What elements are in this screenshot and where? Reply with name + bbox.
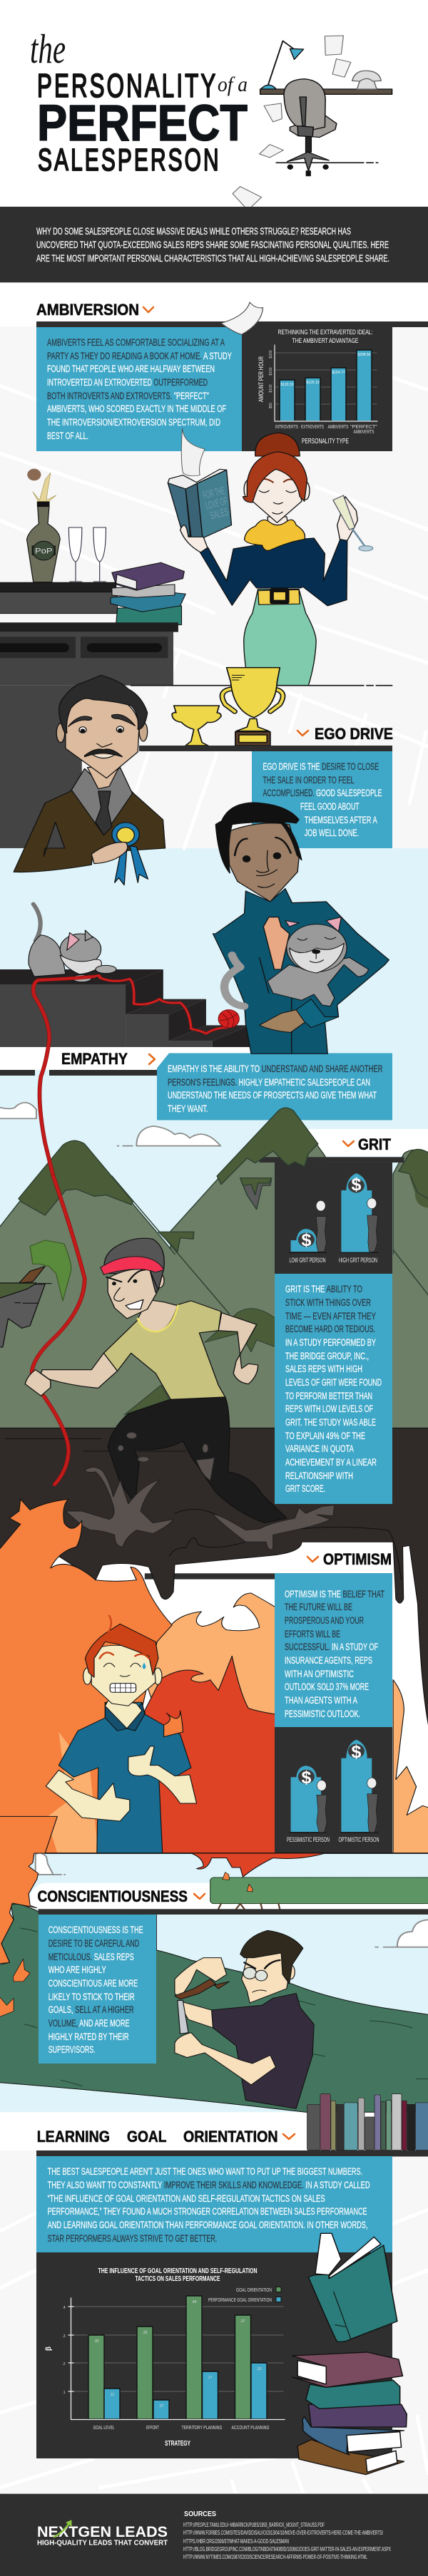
panel: conscientiousness text: LIKELY TO STICK TO THEIR — [49, 1991, 135, 2002]
mountains backdrop — [0, 1108, 428, 1256]
bar chart: goal orientation: .1 — [62, 2391, 66, 2395]
panel: empathy text: THEY WANT. — [168, 1103, 208, 1114]
grit header bar — [260, 1157, 404, 1163]
panel: optimism chart: $ — [302, 1768, 312, 1788]
title: SALESPERSON — [38, 142, 219, 177]
icon: shears — [178, 2001, 188, 2034]
heading: ego drive: EGO DRIVE — [315, 725, 393, 743]
logo: nextgen leads: HIGH-QUALITY LEADS THAT CONVERT — [37, 2539, 168, 2547]
panel: ambiversion text: FOUND THAT PEOPLE WHO ARE HALFWAY BETWEEN — [47, 363, 215, 374]
panel: conscientiousness text: WHO ARE HIGHLY — [49, 1964, 106, 1975]
hedge — [210, 1877, 428, 1904]
bar chart: goal orientation: .30 — [94, 2339, 99, 2344]
icon: clouds — [0, 1103, 220, 1146]
heading: learning goal orientation: GOAL — [127, 2128, 167, 2145]
panel: grit chart: HIGH GRIT PERSON — [339, 1257, 377, 1264]
icon: cat in arms — [225, 917, 369, 1032]
bar chart: goal orientation: .44 — [192, 2300, 197, 2304]
icon: champagne flutes — [68, 527, 106, 582]
icon: champagne bottle: PoP — [35, 546, 53, 555]
panel: conscientiousness text: HIGHLY RATED BY THEIR — [49, 2031, 129, 2042]
panel: ambiversion text: AMBIVERTS FEEL AS COMFORTABLE SOCIALIZING AT A — [47, 336, 225, 348]
cabinet lower body — [0, 622, 392, 848]
bar chart: ambivert advantage: $200 — [269, 350, 273, 359]
shirt — [212, 1994, 314, 2108]
bar chart: ambivert advantage: $125.19 — [306, 381, 320, 385]
face — [56, 695, 148, 789]
maroon book — [292, 2352, 402, 2387]
icon: ribbon rosette — [112, 823, 148, 885]
logo: nextgen leads: NEXTGEN LEADS — [37, 2524, 168, 2540]
hand — [175, 1958, 227, 1998]
heading: ambiversion: AMBIVERSION — [36, 301, 139, 319]
desk top — [260, 89, 392, 94]
panel: optimism text: OUTLOOK SOLD 37% MORE — [285, 1681, 369, 1692]
open book — [168, 469, 232, 538]
icon: persons — [316, 1198, 378, 1252]
stairs — [0, 969, 250, 1047]
panel: conscientiousness text — [39, 1915, 156, 2064]
panel: ego drive text: THE SALE IN ORDER TO FEEL — [263, 774, 355, 785]
bar chart: goal orientation: .11 — [110, 2393, 115, 2397]
panel: optimism chart — [275, 1727, 392, 1853]
icon: champagne bottle — [27, 469, 60, 582]
bar chart: goal orientation: GOAL LEVEL — [93, 2426, 115, 2431]
small trophy — [172, 706, 221, 746]
panel: optimism text: PESSIMISTIC OUTLOOK. — [285, 1708, 360, 1719]
brown book — [297, 2440, 404, 2475]
panel: optimism text — [275, 1573, 392, 1727]
tie — [96, 791, 112, 835]
cat body — [268, 957, 369, 1006]
bar chart: ambivert advantage: AMBIVERTS — [354, 430, 374, 435]
panel: optimism text: PROSPEROUS AND YOUR — [285, 1614, 364, 1626]
sources — [183, 2510, 391, 2560]
scarf — [245, 520, 305, 550]
illustration: climber — [0, 977, 287, 1523]
panel: ego drive text: FEEL GOOD ABOUT — [300, 800, 360, 812]
small flames on hill — [0, 1872, 253, 2017]
bar chart: goal orientation — [36, 2252, 392, 2458]
panel: conscientiousness text: SUPERVISORS. — [49, 2044, 96, 2055]
arms — [46, 1770, 130, 1821]
panel: grit text: REPS WITH LOW LEVELS OF — [285, 1403, 373, 1414]
panel: ego drive text — [252, 751, 392, 848]
title — [30, 26, 248, 177]
panel: grit text: THE BRIDGE GROUP, INC., — [285, 1350, 369, 1361]
head — [101, 1238, 164, 1319]
panel: conscientiousness text: CONSCIENTIOUS ARE MORE — [49, 1977, 138, 1989]
icon: sales columns — [290, 1740, 378, 1833]
legend — [208, 2287, 281, 2303]
face — [215, 803, 302, 902]
jacket — [14, 777, 165, 872]
icon: lamp — [260, 41, 304, 89]
panel: ego drive text: ACCOMPLISHED. GOOD SALESPEOPLE — [263, 787, 382, 798]
panel: grit text: RELATIONSHIP WITH — [285, 1470, 353, 1481]
panel: learning goal orientation text: THEY ALSO WANT TO CONSTANTLY IMPROVE THEIR SKILLS AND KNOWLEDGE. IN A STUDY CALLED — [48, 2179, 370, 2190]
right arm — [218, 1313, 258, 1384]
icon: persons — [317, 1778, 378, 1833]
shirt — [58, 1702, 191, 1853]
panel: grit text: GRIT IS THE ABILITY TO — [285, 1283, 362, 1294]
sky — [0, 1853, 428, 2112]
bar chart: ambivert advantage: $208.56 — [357, 353, 371, 357]
bar chart: goal orientation: TERRITORY PLANNING — [181, 2426, 223, 2431]
panel: footer — [0, 2493, 428, 2576]
panel: grit chart — [275, 1163, 392, 1274]
flame tongue — [160, 1853, 325, 1877]
navy top — [200, 538, 347, 606]
heading: learning goal orientation — [37, 2128, 295, 2145]
panel: grit text: VARIANCE IN QUOTA — [285, 1443, 354, 1454]
book title — [202, 485, 231, 522]
bar chart: ambivert advantage: $150 — [269, 367, 273, 376]
hair — [59, 675, 148, 733]
sources: SOURCES — [184, 2510, 216, 2518]
icon: yarn ball — [218, 1010, 239, 1028]
bar chart: goal orientation: .3 — [62, 2334, 66, 2339]
panel: conscientiousness text: VOLUME, AND ARE MORE — [49, 2017, 130, 2029]
bar chart: ambivert advantage: $154.77 — [332, 371, 345, 375]
body — [213, 889, 389, 1053]
heading: grit: GRIT — [358, 1135, 391, 1153]
panel: optimism text: THAN AGENTS WITH A — [285, 1694, 357, 1706]
panel: ambiversion text: INTROVERTED AN EXTROVERTED OUTPERFORMED — [47, 376, 208, 388]
icon: office chair — [276, 79, 378, 176]
bar chart: ambivert advantage: PERSONALITY TYPE — [302, 438, 349, 445]
hill — [0, 1904, 428, 2112]
bar chart: ambivert advantage: THE AMBIVERT ADVANTAGE — [292, 337, 358, 344]
mud splash — [66, 1467, 335, 1550]
bar chart: goal orientation: THE INFLUENCE OF GOAL ORIENTATION AND SELF-REGULATION — [98, 2267, 257, 2275]
bar chart: goal orientation: .37 — [240, 2319, 245, 2324]
book title: LOVE OF — [205, 495, 229, 512]
panel: learning goal orientation text — [36, 2156, 392, 2252]
panel: grit text: IN A STUDY PERFORMED BY — [285, 1336, 376, 1348]
panel: conscientiousness text: GOALS, SELL AT A HIGHER — [49, 2004, 134, 2015]
empathy header band — [0, 1047, 250, 1076]
title: the — [30, 26, 66, 72]
teal book — [306, 2380, 400, 2408]
panel: optimism text: INSURANCE AGENTS, REPS — [285, 1654, 372, 1666]
panel: grit text: GRIT SCORE. — [285, 1483, 325, 1494]
panel: conscientiousness text: CONSCIENTIOUSNESS IS THE — [49, 1924, 143, 1935]
icon: stack of books — [292, 2352, 407, 2475]
heading: learning goal orientation: LEARNING — [37, 2128, 110, 2145]
ground and mud — [0, 1428, 428, 1732]
panel: optimism text: EFFORTS WILL BE — [285, 1628, 340, 1639]
bar chart: ambivert advantage: $120.10 — [280, 383, 294, 387]
illustration: optimist man — [46, 1616, 197, 1853]
bar chart: ambivert advantage: "PERFECT" — [350, 425, 377, 430]
right flame — [393, 1680, 428, 1855]
bar chart: goal orientation: STRATEGY — [165, 2440, 190, 2448]
icon: open green book — [308, 2233, 397, 2341]
header band — [29, 1883, 428, 1909]
icon: money pile low and high — [290, 1173, 378, 1252]
title: of a — [218, 73, 248, 96]
bar chart: ambivert advantage: AMOUNT PER HOUR — [258, 356, 265, 402]
blue book — [302, 2417, 404, 2455]
hands and glass — [180, 495, 373, 552]
bar chart: goal orientation: β — [45, 2346, 53, 2351]
icon: cloud right — [397, 1920, 428, 1947]
icon: phone — [352, 71, 381, 89]
panel: ego drive text: JOB WELL DONE. — [305, 827, 359, 838]
bar chart: goal orientation: .17 — [208, 2376, 213, 2380]
book title: FOR THE — [202, 485, 226, 502]
peach lower flame — [46, 1732, 98, 1855]
purple book — [308, 2404, 407, 2427]
panel: optimism text: THE FUTURE WILL BE — [285, 1601, 352, 1612]
panel: learning goal orientation text: STAR PERFORMERS ALWAYS STRIVE TO GET BETTER. — [48, 2232, 217, 2244]
illustration: cabinet with champagne and books — [0, 469, 185, 625]
illustration: woman with book — [168, 428, 373, 686]
panel: grit text: BECOME HARD OR TEDIOUS. — [285, 1323, 375, 1334]
hand on rope — [25, 1370, 51, 1396]
panel: introduction — [0, 207, 428, 283]
panel: optimism chart: $ — [352, 1742, 362, 1762]
peach flame — [148, 1593, 276, 1734]
panel: empathy text — [157, 1053, 392, 1120]
panel: optimism text: OPTIMISM IS THE BELIEF THAT — [285, 1588, 384, 1599]
bar chart: ambivert advantage: EXTROVERTS — [301, 425, 324, 430]
heading: conscientiousness: CONSCIENTIOUSNESS — [37, 1887, 188, 1905]
panel: ego drive text: THEMSELVES AFTER A — [305, 814, 377, 825]
heading: grit — [343, 1135, 391, 1153]
head — [83, 1616, 162, 1729]
collar — [71, 768, 133, 835]
panel: grit chart: $ — [352, 1175, 362, 1195]
logo: nextgen leads — [37, 2520, 168, 2547]
panel: ambiversion text: PARTY AS THEY DO READING A BOOK AT HOME. A STUDY — [47, 350, 232, 361]
cabinet top — [0, 582, 118, 614]
ambiversion bar — [36, 321, 428, 327]
panel: ambiversion text: AMBIVERTS, WHO SCORED EXACTLY IN THE MIDDLE OF — [47, 403, 226, 414]
sources: HTTPS://HBR.ORG/2006/07/WHAT-MAKES-A-GOOD-SALESMAN — [183, 2538, 289, 2545]
paper on book — [181, 428, 205, 476]
panel: grit text: STICK WITH THINGS OVER — [285, 1297, 371, 1308]
title: PERSONALITY — [37, 68, 215, 105]
legs — [108, 1397, 287, 1523]
icon: book stack — [111, 562, 185, 625]
icon: cloud — [36, 1853, 54, 1875]
text: introduction — [36, 225, 389, 264]
paper over panel — [221, 302, 263, 334]
bar chart: goal orientation: .2 — [62, 2362, 66, 2366]
panel: optimism text: WITH AN OPTIMISTIC — [285, 1668, 354, 1679]
panel: ambiversion text: THE INTROVERSION/EXTROVERSION SPECTRUM, DID — [47, 416, 220, 428]
bar chart: ambivert advantage: AMBIVERTS — [328, 425, 349, 430]
icon: rope — [32, 977, 94, 1485]
panel: grit text: ACHIEVEMENT BY A LINEAR — [285, 1456, 377, 1468]
tie — [263, 917, 290, 969]
mountain caps and rocks — [19, 1140, 428, 1252]
bar chart: goal orientation: .20 — [257, 2367, 262, 2371]
skirt — [244, 589, 316, 686]
learning bar — [36, 2150, 428, 2157]
left arm — [41, 1353, 118, 1388]
panel: grit chart: LOW GRIT PERSON — [290, 1257, 325, 1264]
hand and cuff — [260, 1010, 306, 1032]
dark header bar — [39, 1909, 428, 1915]
bar chart: goal orientation: EFFORT — [146, 2426, 159, 2431]
icon: cat on stairs — [29, 904, 116, 982]
mud stains — [118, 1433, 214, 1480]
bar chart: ambivert advantage — [242, 327, 392, 451]
legend: PERFORMANCE GOAL ORIENTATION — [208, 2298, 272, 2303]
panel: ambiversion text: BOTH INTROVERTS AND EXTROVERTS. "PERFECT" — [47, 390, 209, 401]
lower mountains — [0, 1176, 428, 1455]
optimism bar behind mud — [145, 1573, 276, 1580]
panel: conscientiousness text: DESIRE TO BE CAREFUL AND — [49, 1937, 139, 1949]
panel: grit text: SALES REPS WITH HIGH — [285, 1363, 362, 1374]
bar chart: ambivert advantage: $50 — [269, 403, 273, 408]
neck — [138, 1299, 178, 1331]
panel: conscientiousness text: METICULOUS. SALES REPS — [49, 1951, 134, 1962]
panel: grit chart: $ — [302, 1230, 312, 1250]
heading: optimism: OPTIMISM — [323, 1550, 392, 1568]
cat head — [287, 924, 347, 972]
illustration: flames — [0, 1499, 428, 1855]
panel: optimism text: SUCCESSFUL. IN A STUDY OF — [285, 1641, 378, 1652]
panel: grit text: TO PERFORM BETTER THAN — [285, 1390, 372, 1401]
bar chart: ambivert advantage: $100 — [269, 384, 273, 393]
hair — [243, 433, 307, 503]
panel: grit text: GRIT. THE STUDY WAS ABLE — [285, 1416, 376, 1428]
heading: empathy: EMPATHY — [61, 1050, 128, 1068]
illustration: man with ribbon — [14, 675, 165, 885]
heading: learning goal orientation: ORIENTATION — [183, 2128, 278, 2145]
shirt — [103, 1301, 225, 1399]
panel: optimism chart: PESSIMISTIC PERSON — [287, 1836, 330, 1843]
legend: GOAL ORIENTATION — [236, 2288, 272, 2293]
bar chart: goal orientation: TACTICS ON SALES PERFORMANCE — [136, 2275, 220, 2283]
head — [240, 1930, 303, 2003]
scene: garden background — [0, 1816, 428, 2112]
panel: optimism chart: OPTIMISTIC PERSON — [338, 1836, 379, 1843]
orange flame edge — [0, 1816, 57, 1964]
panel: ambiversion text — [36, 327, 242, 451]
bar chart: goal orientation: .07 — [159, 2404, 164, 2408]
hand — [91, 842, 128, 864]
panel: grit text: TO EXPLAIN 49% OF THE — [285, 1430, 365, 1441]
bar chart: ambivert advantage: RETHINKING THE EXTRAVERTED IDEAL: — [278, 329, 372, 336]
bar chart: ambivert advantage: INTROVERTS — [275, 425, 298, 430]
cat tail — [225, 955, 245, 1006]
sources: HTTP://PEOPLE.TAMU.EDU/~MBARRICK/PUBS/1993_BARRICK_MOUNT_STRAUSS.PDF — [183, 2522, 325, 2528]
illustration: gardener — [175, 1930, 314, 2108]
grit header band — [308, 1129, 428, 1156]
book title: SALES — [209, 506, 230, 522]
panel: grit text: TIME — EVEN AFTER THEY — [285, 1310, 376, 1322]
bar chart: goal orientation: .4 — [62, 2306, 66, 2310]
bar chart: goal orientation: .33 — [143, 2331, 148, 2335]
icon: trophies — [172, 668, 283, 746]
bar chart: goal orientation: ACCOUNT PLANNING — [231, 2426, 270, 2431]
cliff and tree — [0, 1240, 71, 1347]
mountain summit over header — [217, 1108, 318, 1185]
ego drive bar — [139, 746, 392, 751]
panel: grit text — [275, 1274, 392, 1504]
panel: ambiversion text: BEST OF ALL. — [47, 430, 88, 441]
desk illustration — [233, 36, 392, 210]
large trophy — [222, 668, 283, 746]
icon: floating papers — [233, 36, 351, 210]
small flame on shoulder — [164, 1711, 183, 1737]
arms — [178, 2001, 213, 2028]
belt — [258, 589, 300, 604]
red yarn — [94, 976, 239, 1034]
neck and face — [244, 469, 310, 532]
icon: book row — [307, 2094, 428, 2150]
title: PERFECT — [37, 96, 248, 152]
branch — [175, 1979, 229, 1999]
orange flame — [0, 1499, 172, 1855]
illustration: man holding cat — [213, 803, 389, 1053]
panel: ego drive text: EGO DRIVE IS THE DESIRE TO CLOSE — [263, 761, 379, 772]
red flame — [145, 1656, 276, 1855]
